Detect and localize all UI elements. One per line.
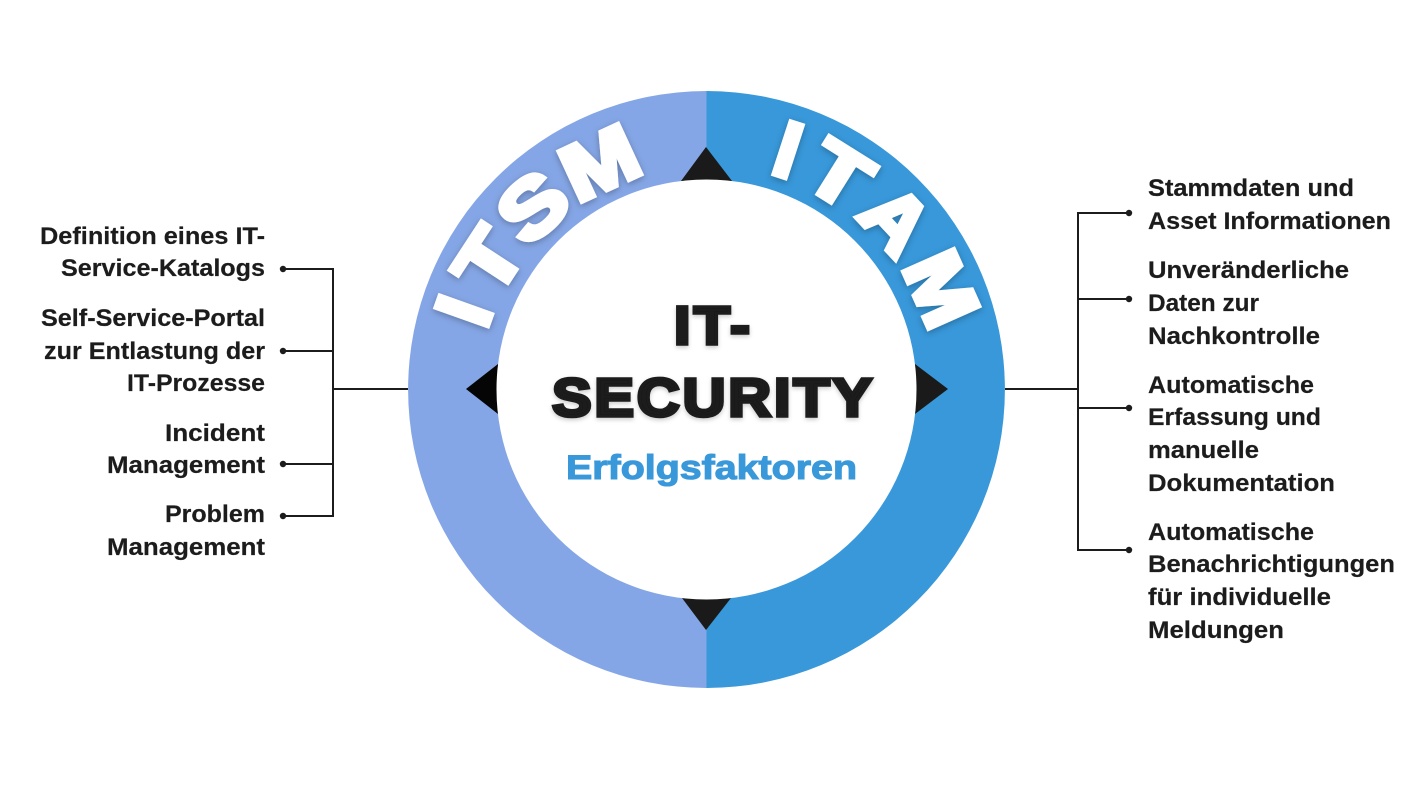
right list: ITAM factors: Erfassung und [1148, 404, 1321, 431]
right connector [1005, 210, 1132, 553]
right list: ITAM factors: Benachrichtigungen [1148, 551, 1395, 578]
left list: ITSM factors: Self-Service-Portal [41, 305, 265, 332]
curved label ITAM: M [886, 238, 996, 340]
right ITAM half ring [706, 91, 1005, 688]
curved label ITAM: T [791, 123, 887, 228]
right list: ITAM factors: manuelle [1148, 437, 1259, 464]
curved label ITSM [418, 108, 653, 336]
left list: ITSM factors: Management [107, 534, 265, 561]
left list: ITSM factors: zur Entlastung der [44, 338, 265, 365]
left list: ITSM factors: Definition eines IT- [40, 223, 265, 250]
right list: ITAM factors: Meldungen [1148, 617, 1284, 644]
left list: ITSM factors: Management [107, 452, 265, 479]
left connector [280, 266, 408, 519]
right list: ITAM factors: Asset Informationen [1148, 208, 1391, 235]
curved label ITSM: M [547, 108, 653, 219]
left ITSM half ring [408, 91, 706, 688]
title IT-SECURITY [552, 296, 872, 428]
title IT-SECURITY: SECURITY [552, 368, 872, 428]
right list: ITAM factors: Dokumentation [1148, 470, 1335, 497]
arrow markers [466, 147, 948, 630]
left list: ITSM factors: IT-Prozesse [127, 370, 265, 397]
curved label ITAM: I [764, 104, 812, 195]
left list: ITSM factors: Problem [165, 501, 265, 528]
curved label ITSM: S [479, 152, 586, 261]
title IT-SECURITY: IT- [674, 296, 750, 356]
left list: ITSM factors [40, 223, 265, 561]
right list: ITAM factors: für individuelle [1148, 584, 1331, 611]
curved label ITSM: T [437, 213, 542, 309]
right list: ITAM factors: Automatische [1148, 519, 1314, 546]
right list: ITAM factors: Stammdaten und [1148, 175, 1354, 202]
curved label ITSM: I [418, 286, 509, 336]
right list: ITAM factors [1148, 175, 1395, 644]
subtitle Erfolgsfaktoren: Erfolgsfaktoren [566, 449, 857, 487]
right list: ITAM factors: Nachkontrolle [1148, 323, 1320, 350]
curved label ITAM: A [843, 168, 949, 272]
left list: ITSM factors: Incident [165, 420, 265, 447]
curved label ITAM [764, 104, 996, 340]
right list: ITAM factors: Automatische [1148, 372, 1314, 399]
right list: ITAM factors: Unveränderliche [1148, 257, 1349, 284]
right list: ITAM factors: Daten zur [1148, 290, 1259, 317]
centre circle [496, 180, 916, 600]
left list: ITSM factors: Service-Katalogs [61, 255, 265, 282]
